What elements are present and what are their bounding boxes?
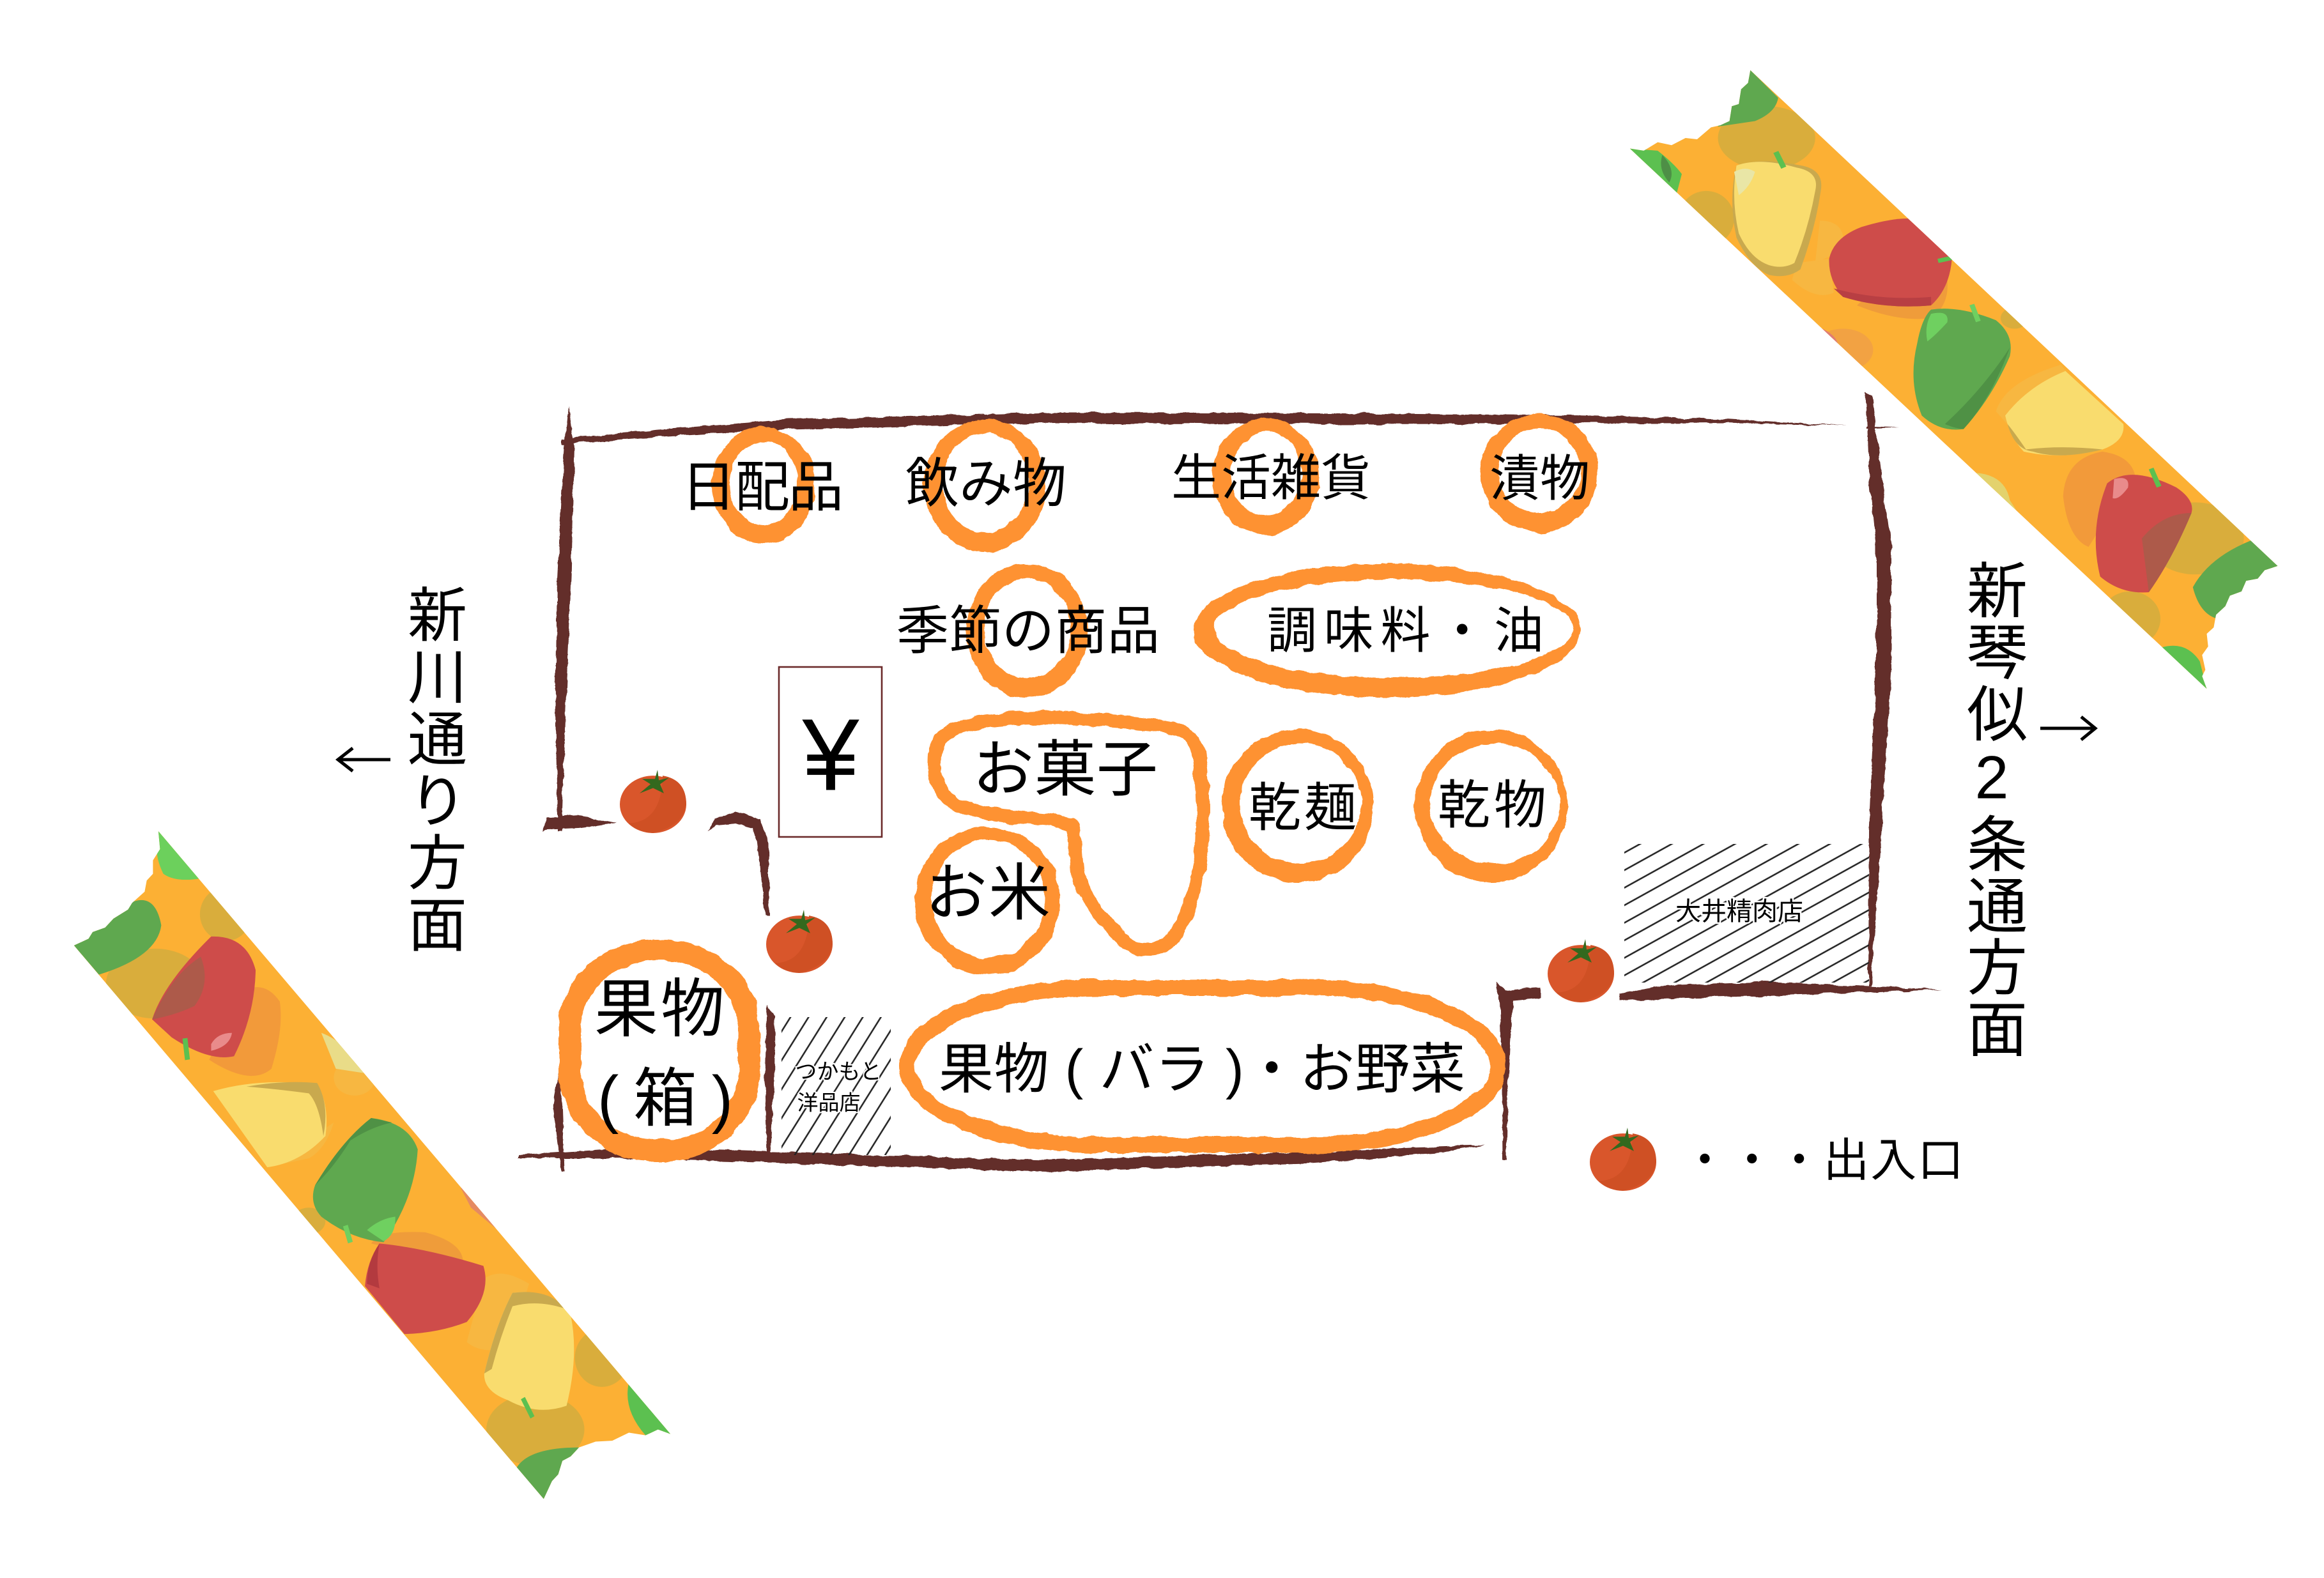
section: 飲み物 xyxy=(905,419,1066,551)
label: (箱): ( 箱 ) xyxy=(597,1063,733,1135)
label: 漬物 xyxy=(1489,450,1590,507)
label: 日配品 xyxy=(681,457,843,518)
tomato: entrance left xyxy=(620,770,686,833)
ring xyxy=(1194,563,1580,698)
label: 季節の商品 xyxy=(897,602,1160,661)
label: お米 xyxy=(925,859,1050,928)
label: 乾麺 xyxy=(1249,779,1357,837)
section: 果物(バラ)・お野菜 xyxy=(907,988,1498,1145)
arrow: right xyxy=(2040,717,2095,740)
ring xyxy=(1213,418,1319,535)
left entrance stub xyxy=(543,815,617,832)
hatch xyxy=(1624,844,1869,983)
hatch xyxy=(781,1017,891,1155)
legend: tomato = entrance xyxy=(1590,1128,1964,1191)
arrow: left xyxy=(338,748,390,771)
ring xyxy=(907,988,1498,1145)
neighbouring shop: 大井精肉店 xyxy=(1624,844,1869,983)
ring xyxy=(1222,730,1374,882)
top wall xyxy=(562,413,1847,444)
bottom wall xyxy=(518,1145,1486,1172)
register box with yen sign: ¥ xyxy=(802,698,860,811)
washi tape: bottom left with peppers xyxy=(74,831,670,1499)
section: 漬物 xyxy=(1481,414,1598,532)
section: お菓子 xyxy=(935,717,1203,949)
right lower wall xyxy=(1619,982,1943,1002)
shop name: 大井精肉店 xyxy=(1675,898,1803,926)
road label: 新琴似2条通方面: 新琴似2条通方面 xyxy=(1958,559,2026,1059)
road label: 新川通り方面: 新川通り方面 xyxy=(399,584,465,956)
right entrance post xyxy=(1496,982,1540,1160)
ring xyxy=(1415,730,1567,882)
top wall tail xyxy=(1866,426,1899,429)
shop name second line: 洋品店 xyxy=(797,1091,860,1114)
left wall xyxy=(555,406,574,831)
label: 生活雑貨 xyxy=(1171,450,1371,506)
section: 季節の商品 xyxy=(897,564,1160,698)
store walls xyxy=(518,392,1943,1172)
washi tape: top right with peppers xyxy=(1629,70,2277,689)
ring xyxy=(935,717,1203,949)
ring xyxy=(915,827,1060,975)
legend tomato xyxy=(1590,1128,1656,1191)
tomato: entrance centre xyxy=(766,910,833,973)
ring xyxy=(570,950,749,1151)
entrance corner wall xyxy=(707,812,769,915)
neighbouring shop: つかもと洋品店 xyxy=(781,1017,891,1155)
shop name: つかもと xyxy=(795,1060,882,1084)
section: お米 xyxy=(915,827,1060,975)
ring xyxy=(966,564,1088,698)
lower left wall xyxy=(553,1066,565,1172)
ring xyxy=(712,427,815,544)
label: 果物: 果物 xyxy=(594,974,725,1045)
section: 果物(箱) xyxy=(570,950,749,1151)
ring xyxy=(1481,414,1598,532)
section: 乾麺 xyxy=(1222,730,1374,882)
right wall xyxy=(1866,392,1891,986)
label: 乾物 xyxy=(1438,777,1546,834)
ring xyxy=(924,419,1046,551)
section: 乾物 xyxy=(1415,730,1567,882)
label: 果物 ( バラ )・お野菜 xyxy=(939,1039,1465,1100)
label: 調味料・油 xyxy=(1267,602,1544,659)
section: 生活雑貨 xyxy=(1171,418,1371,535)
tomato: entrance right xyxy=(1548,939,1614,1002)
shop divider wall xyxy=(765,1005,775,1153)
section: 日配品 xyxy=(681,427,843,544)
legend text: ・・・出入口 xyxy=(1682,1135,1964,1186)
register box with yen sign xyxy=(779,667,882,837)
section: 調味料・油 xyxy=(1194,563,1580,698)
label: お菓子 xyxy=(973,736,1158,804)
label: 飲み物 xyxy=(905,454,1066,514)
